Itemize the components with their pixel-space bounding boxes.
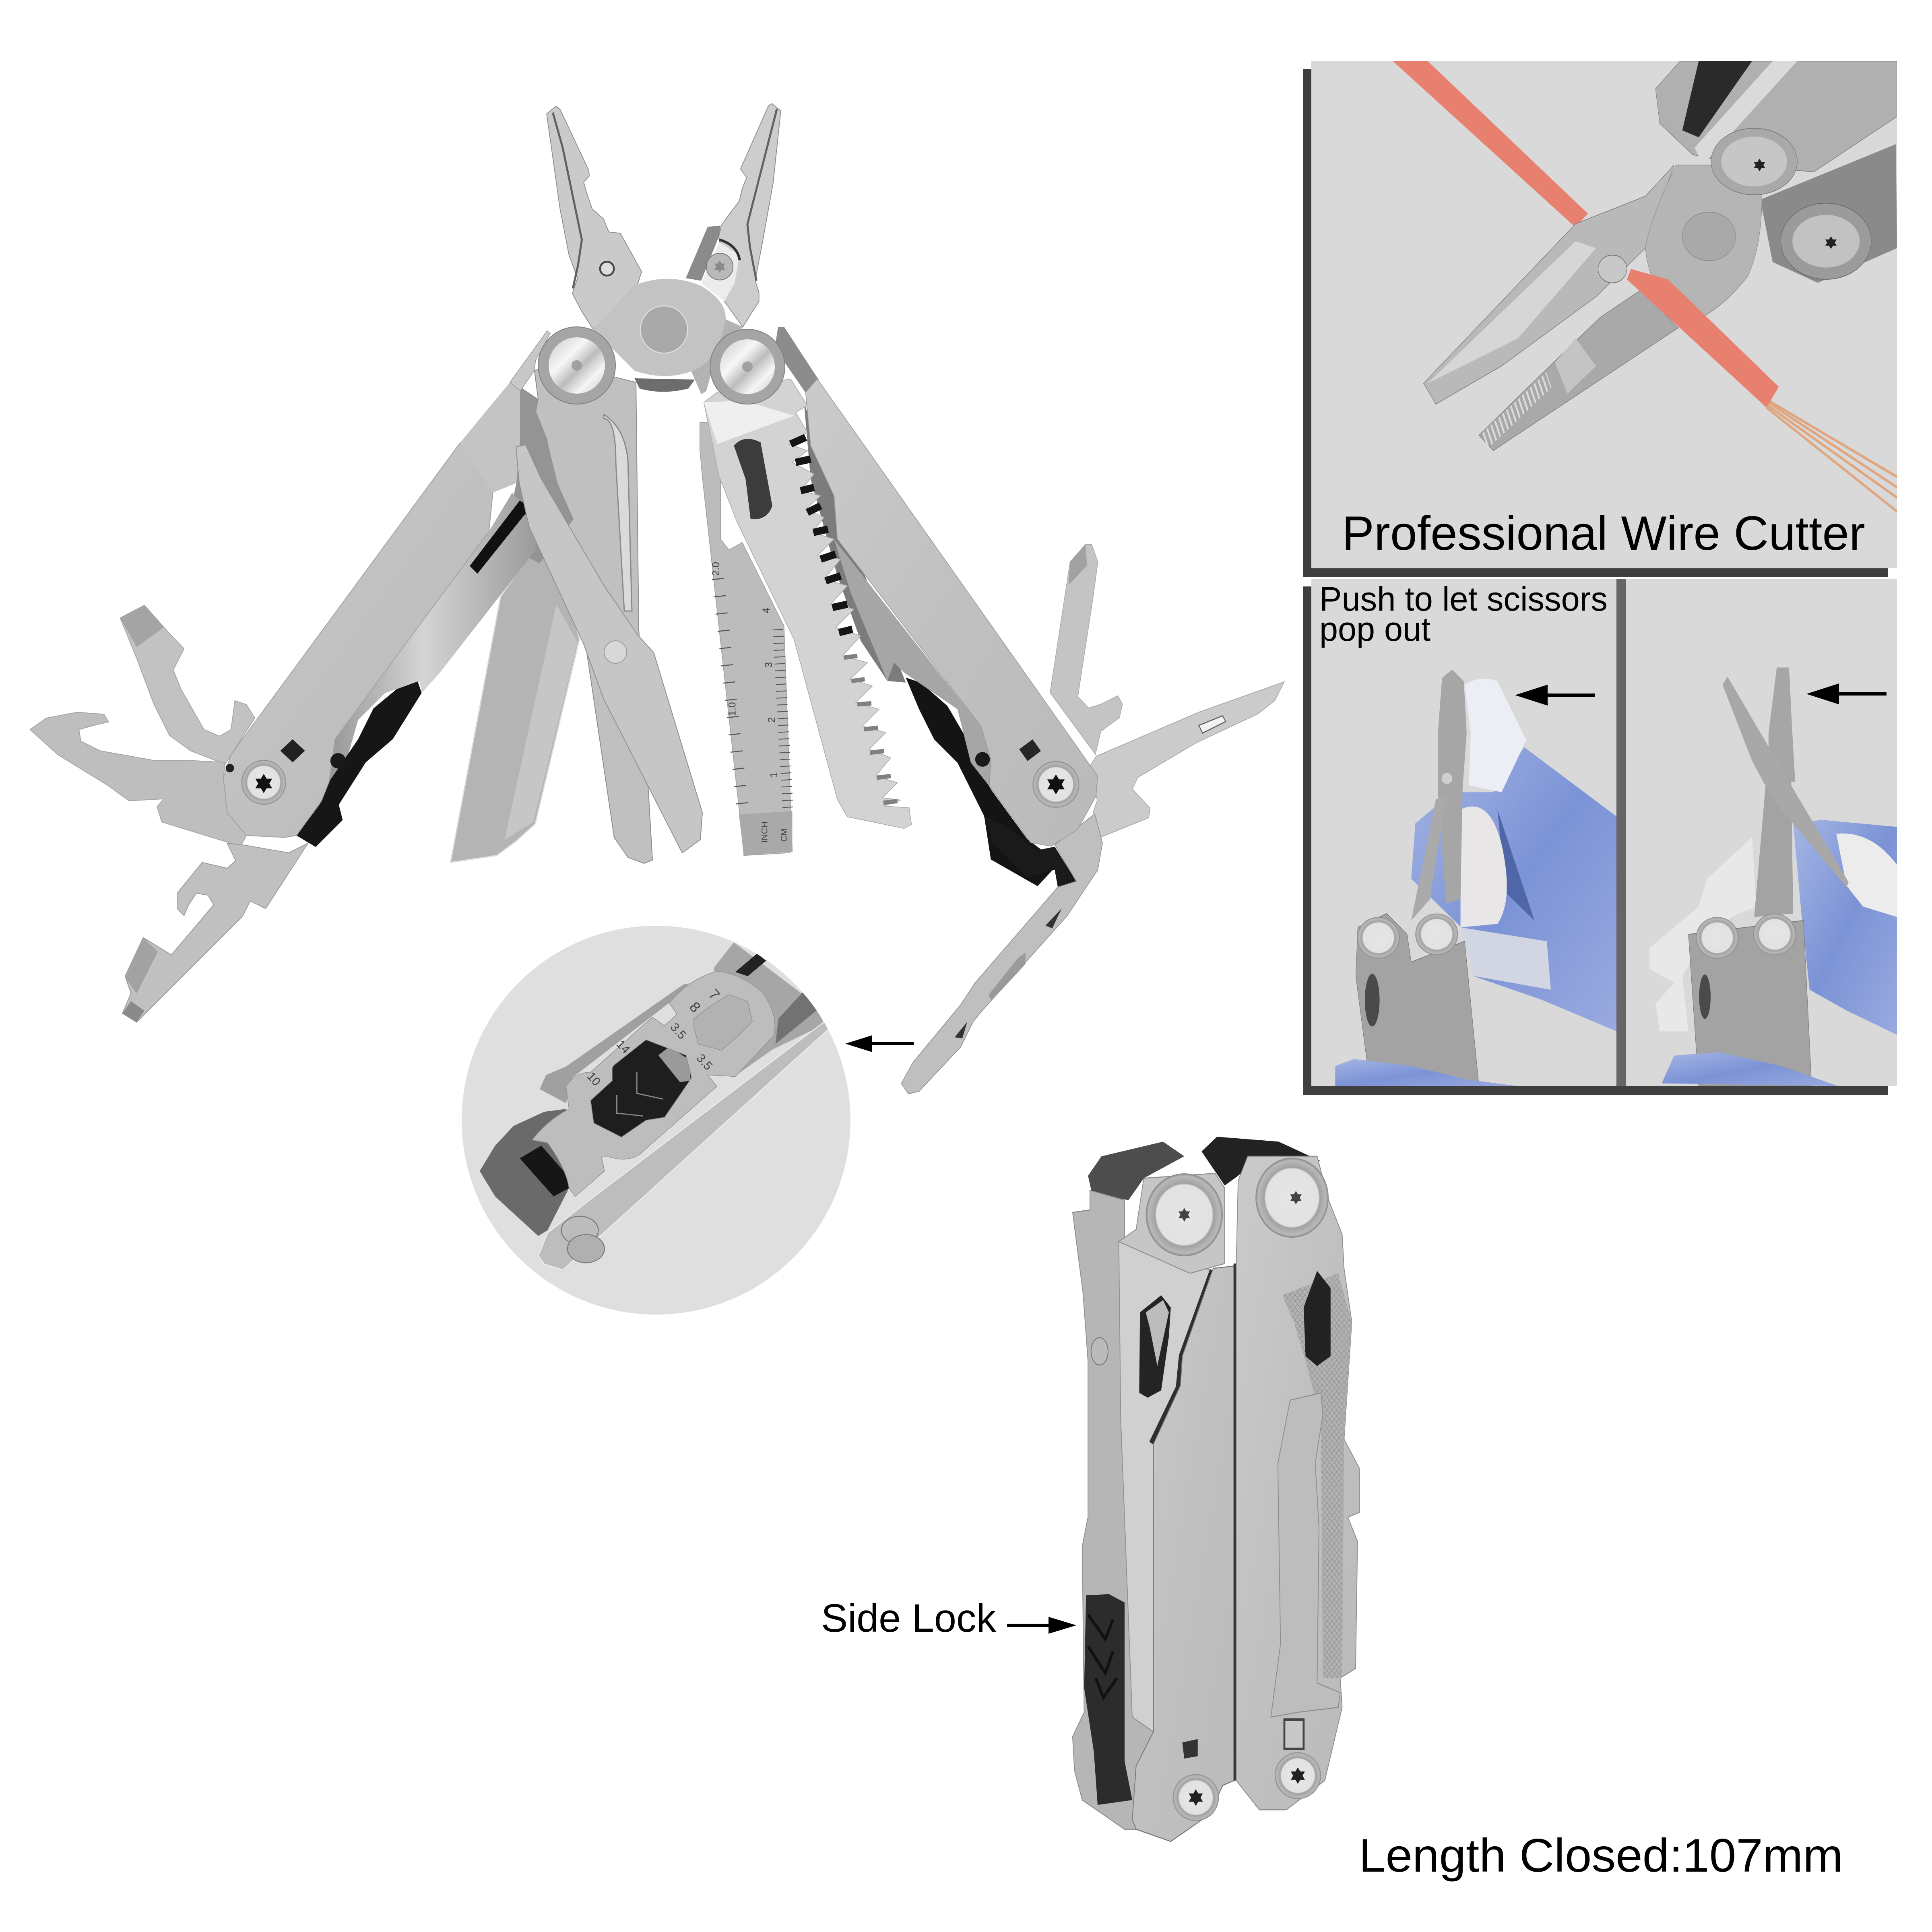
dark stack <box>480 1109 569 1236</box>
wrench numbers: 10 <box>584 1070 603 1088</box>
ruler numbers: 3 <box>763 662 774 668</box>
screw star <box>714 260 725 273</box>
curved groove <box>719 239 740 260</box>
screw star <box>255 774 272 793</box>
ruler numbers: 1 <box>768 772 780 778</box>
bottom screw one <box>561 1216 598 1245</box>
side lock label: Side Lock <box>821 1596 997 1640</box>
flat screwdriver <box>120 605 255 764</box>
dark frame gap <box>1682 61 1752 137</box>
bottom wrench tool <box>122 843 308 1022</box>
left side tools <box>30 443 539 1022</box>
shadow filler behind left handle <box>503 381 574 564</box>
panel shadow <box>1303 69 1888 577</box>
callout arrow <box>845 1035 914 1052</box>
scissors stem <box>1754 775 1793 917</box>
panel background <box>1311 61 1897 568</box>
left handle top <box>460 381 520 493</box>
back channel <box>714 942 825 1078</box>
wrench numbers: 8 <box>686 999 704 1016</box>
right pivot disc <box>710 329 785 404</box>
right jaw back <box>686 225 720 281</box>
saw and right tools <box>704 379 911 828</box>
blue glove <box>1793 820 1897 1035</box>
length label: Length Closed:107mm <box>1359 1829 1843 1882</box>
left pivot disc <box>538 327 615 404</box>
black lock left <box>297 681 421 847</box>
jaw highlight <box>1428 241 1596 383</box>
wrench tip <box>122 1001 144 1022</box>
lower tooth marks <box>844 656 898 803</box>
screw two <box>1781 203 1871 279</box>
open multi-tool <box>30 103 1284 1094</box>
rivet hole <box>975 752 990 767</box>
saw tooth shadows <box>791 438 852 633</box>
bottle opener <box>30 712 246 846</box>
phillips screwdriver <box>1050 545 1123 754</box>
slot <box>1365 974 1380 1026</box>
slot left <box>1139 1295 1171 1397</box>
ruler <box>700 422 792 855</box>
copper strands <box>1767 400 1897 512</box>
notch <box>226 764 234 772</box>
right photo <box>1649 667 1897 1086</box>
side lock arrow <box>1007 1617 1076 1634</box>
ruler numbers: 2.0 <box>710 562 722 576</box>
right channel shade <box>776 992 817 1044</box>
black cap <box>520 1146 569 1197</box>
star bottom right <box>1291 1767 1305 1784</box>
slot highlight <box>1146 1300 1169 1366</box>
lower finger <box>1461 927 1551 990</box>
chevrons <box>617 1072 663 1116</box>
long file tool <box>901 814 1102 1094</box>
left jaw <box>547 106 642 330</box>
scissors <box>516 445 702 853</box>
ruler head band <box>739 811 792 855</box>
light strip <box>1695 61 1797 165</box>
slot <box>1699 974 1711 1019</box>
saw shiny top <box>704 400 794 444</box>
scissors caption: pop out <box>1319 610 1430 648</box>
screw one star <box>1754 159 1765 171</box>
scissors blade <box>1769 667 1795 782</box>
panel: professional wire cutter <box>1303 61 1897 577</box>
lower jaw <box>1479 290 1678 450</box>
file slots dark <box>955 908 1062 1038</box>
driver tip <box>120 605 164 647</box>
panel shadow <box>1303 586 1888 1095</box>
top plate left <box>1119 1173 1225 1274</box>
lower arc <box>634 378 695 392</box>
white fingers right <box>1836 834 1897 917</box>
rear strip <box>540 983 689 1103</box>
plier photo <box>1393 61 1897 512</box>
screw two star <box>1825 236 1837 249</box>
pen knife <box>1090 682 1284 837</box>
scissors pivot <box>1442 773 1452 784</box>
star top right <box>1290 1191 1302 1205</box>
left jaw groove <box>553 113 582 289</box>
left blade strip <box>1119 1242 1213 1732</box>
wire upper <box>1393 61 1588 227</box>
jaw screw <box>706 253 733 280</box>
dark top right <box>1201 1137 1321 1185</box>
right jaw groove <box>747 109 777 281</box>
screw top right <box>1255 1158 1329 1238</box>
wire lower <box>1627 269 1779 408</box>
screw star <box>1047 774 1065 795</box>
wire stripper bar <box>535 362 652 863</box>
left handle face <box>223 443 512 838</box>
panel: push scissors <box>1303 579 1897 1095</box>
scissors pivot <box>604 641 627 663</box>
phillips tip <box>1069 545 1087 585</box>
white finger <box>1461 807 1507 927</box>
jaw screw <box>1598 255 1627 283</box>
right jaw <box>719 103 781 327</box>
white hand <box>1649 837 1756 1031</box>
right body <box>1236 1156 1360 1810</box>
channel under right handle <box>804 402 906 683</box>
scissors caption: Push to let scissors <box>1319 580 1608 618</box>
rivet hole <box>330 753 346 768</box>
bar groove <box>604 415 632 611</box>
ruler numbers <box>710 562 788 843</box>
bottom glove <box>1662 1052 1838 1086</box>
rivet <box>1091 1338 1108 1365</box>
upper jaw <box>1424 165 1674 404</box>
scissors blade <box>1438 669 1467 903</box>
cm ticks <box>778 629 788 809</box>
chevrons <box>1088 1615 1117 1698</box>
glove fold <box>1497 809 1534 921</box>
right jaw plate <box>701 242 740 301</box>
left channel <box>308 493 539 836</box>
panel caption: Professional Wire Cutter <box>1342 506 1865 560</box>
wrench numbers: 3.5 <box>694 1051 715 1073</box>
center gap <box>1234 1263 1238 1781</box>
disc one <box>1696 917 1738 959</box>
panel background <box>1311 579 1897 1086</box>
screw one <box>1711 128 1797 195</box>
rear left body <box>1073 1191 1154 1829</box>
ruler numbers: CM <box>778 828 788 842</box>
zoomed tool <box>480 942 831 1270</box>
phillips, knife and file tools <box>901 545 1284 1094</box>
disc two <box>1753 914 1796 955</box>
screw top left <box>1146 1173 1223 1256</box>
callout circle: wrench detail <box>462 926 850 1315</box>
screw bottom right <box>1275 1752 1321 1799</box>
screw bottom left <box>1173 1774 1219 1821</box>
bottom glove <box>1335 1059 1518 1086</box>
wrench numbers <box>584 986 723 1088</box>
ruler numbers: INCH <box>759 822 769 843</box>
folding knife blade <box>450 547 580 863</box>
lower dark block <box>984 816 1076 887</box>
bottom screw two <box>568 1234 605 1263</box>
pivot oval <box>640 306 687 353</box>
clip latch <box>1284 1719 1304 1749</box>
handle channel <box>834 539 991 786</box>
slot right <box>1304 1271 1331 1366</box>
pliers head <box>547 103 781 394</box>
black lock right <box>906 677 1059 886</box>
right handle top strip <box>775 327 819 394</box>
wrench numbers: 14 <box>614 1038 632 1056</box>
knurled grip <box>1282 1274 1352 1678</box>
blue glove <box>1411 747 1616 1031</box>
black strip <box>470 500 531 574</box>
belt clip <box>1271 1393 1340 1717</box>
closed tool body <box>1688 921 1812 1086</box>
ruler numbers: 1.0 <box>727 702 738 716</box>
scissors caption <box>1319 580 1608 648</box>
jaw step <box>1555 338 1596 394</box>
disc one <box>1357 917 1400 959</box>
wrench numbers: 7 <box>706 986 723 1003</box>
square hole <box>1019 739 1041 761</box>
right handle <box>806 379 1098 846</box>
white thumb <box>1465 679 1526 792</box>
disc two <box>1415 914 1458 955</box>
wrench bevel <box>125 937 158 993</box>
front left panel <box>1132 1266 1234 1841</box>
jaw serration <box>1485 380 1549 441</box>
wrench numbers: 3.5 <box>668 1020 689 1042</box>
closed tool body <box>1356 914 1479 1086</box>
square hole <box>280 739 305 762</box>
black side lock <box>1084 1594 1132 1805</box>
dark diagonal <box>735 954 766 976</box>
ruler numbers: 4 <box>761 607 772 613</box>
scissors second blade <box>1723 677 1849 887</box>
saw slot <box>734 439 772 519</box>
saw blade <box>704 379 911 828</box>
screw <box>242 760 286 805</box>
silver band <box>538 1022 831 1270</box>
jaw hole <box>600 262 614 276</box>
scissors stem <box>1411 796 1446 921</box>
textured piece <box>691 319 743 394</box>
knife slot <box>1199 716 1226 733</box>
upper frame <box>1655 61 1897 172</box>
plier head <box>1645 165 1762 324</box>
hex hole backing <box>689 990 757 1055</box>
arrow two <box>1806 683 1887 704</box>
panel divider <box>1616 579 1626 1086</box>
star bottom left <box>1189 1789 1203 1806</box>
inch ticks <box>718 578 742 805</box>
screw <box>1032 761 1079 808</box>
wrench <box>532 971 775 1197</box>
pivot oval <box>1682 212 1736 261</box>
left photo <box>1335 669 1616 1086</box>
left arm strip <box>510 331 550 391</box>
black lock behind wrench <box>588 1037 694 1140</box>
square hole <box>1182 1739 1198 1759</box>
ruler numbers: 2 <box>766 717 777 722</box>
star top left <box>1179 1208 1190 1222</box>
handle face <box>806 379 1098 846</box>
arrow one <box>1515 685 1595 706</box>
light block <box>658 1047 691 1082</box>
closed multi-tool <box>1073 1137 1360 1841</box>
rear handle <box>1760 144 1897 283</box>
dark top left <box>1088 1141 1184 1200</box>
edge shadow <box>1152 1271 1213 1444</box>
central disc <box>593 279 726 376</box>
file slot long <box>989 953 1026 1001</box>
